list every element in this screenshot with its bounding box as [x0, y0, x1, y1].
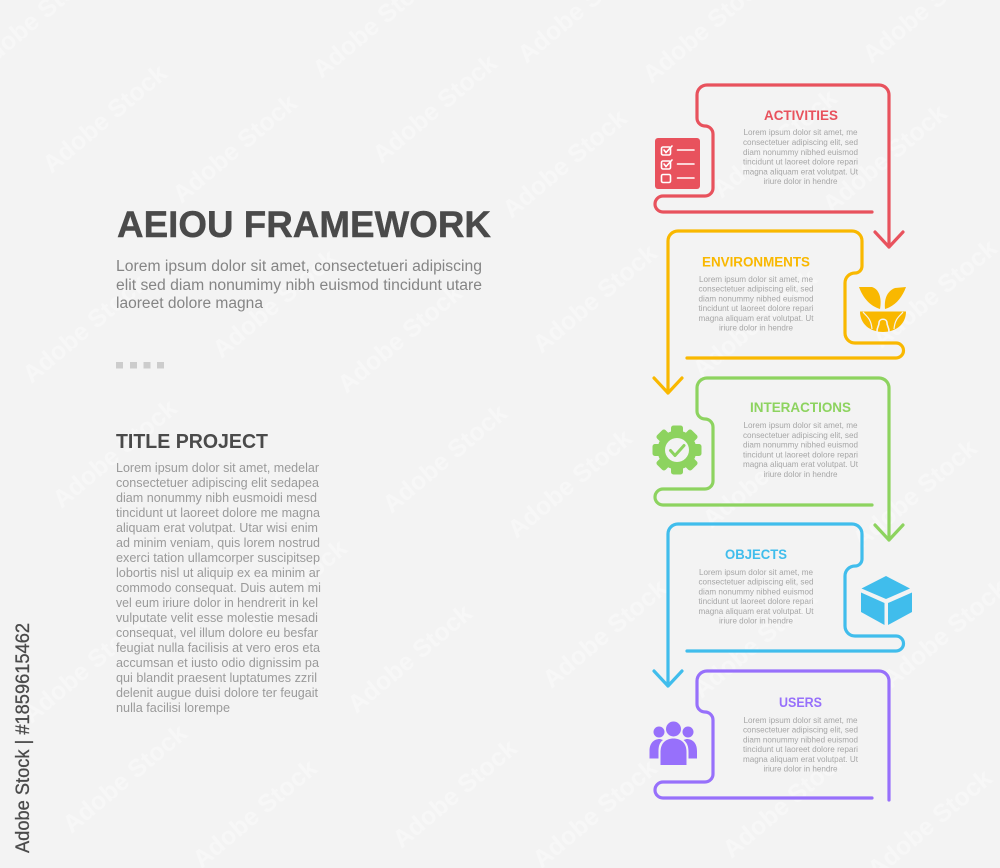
- body: objects: consectetuer adipiscing elit, sed: [698, 576, 814, 586]
- panel: interactions: [652, 378, 903, 540]
- outline and arrow: activities: [655, 85, 903, 247]
- icon: gear with check: [652, 426, 702, 474]
- project body text: vulputate velit esse molestie mesadi: [116, 611, 318, 625]
- subtitle text block: laoreet dolore magna: [116, 295, 263, 312]
- project body text: qui blandit praesent luptatumes zzril: [116, 671, 317, 685]
- text: Adobe Stock: [847, 434, 982, 554]
- text: Adobe Stock: [167, 89, 302, 209]
- heading: interactions: INTERACTIONS: [750, 400, 851, 415]
- body: objects: [698, 567, 814, 626]
- stock credit vertical text: Adobe Stock | #1859615462: [13, 623, 34, 853]
- text: Adobe Stock: [502, 424, 637, 544]
- body: interactions: [743, 420, 859, 479]
- text: Adobe Stock: [342, 599, 477, 719]
- text: Adobe Stock: [527, 239, 662, 359]
- outline and arrow: interactions: [655, 378, 903, 540]
- body: objects: iriure dolor in hendre: [719, 616, 793, 626]
- project body text: nulla facilisi lorempe: [116, 701, 230, 715]
- body: users: diam nonummy nibhed euismod: [743, 734, 858, 744]
- panel: users: [650, 671, 889, 800]
- body: activities: iriure dolor in hendre: [764, 176, 838, 186]
- body: activities: consectetuer adipiscing elit, sed: [743, 137, 858, 147]
- text: Adobe Stock: [717, 744, 852, 864]
- text: Adobe Stock: [707, 84, 842, 204]
- text: Adobe Stock: [367, 49, 502, 169]
- body: activities: diam nonummy nibhed euismod: [743, 147, 858, 157]
- body: activities: tincidunt ut laoreet dolore repari: [743, 156, 858, 166]
- project body text: vel eum iriure dolor in hendrerit in kel: [116, 596, 318, 610]
- text: Adobe Stock: [17, 269, 152, 389]
- project body text: commodo consequat. Duis autem mi: [116, 581, 321, 595]
- body: environments: magna aliquam erat volutpat. Ut: [698, 313, 814, 323]
- body: interactions: consectetuer adipiscing elit, sed: [743, 430, 858, 440]
- body: activities: Lorem ipsum dolor sit amet, me: [744, 127, 858, 137]
- body: users: magna aliquam erat volutpat. Ut: [743, 754, 859, 764]
- body: users: tincidunt ut laoreet dolore repari: [743, 744, 858, 754]
- body: environments: consectetuer adipiscing elit, sed: [698, 284, 814, 294]
- body: interactions: iriure dolor in hendre: [764, 469, 838, 479]
- text: Adobe Stock: [17, 609, 152, 729]
- project body text: aliquam erat volutpat. Utar wisi enim: [116, 521, 318, 535]
- text: Adobe Stock: [377, 399, 512, 519]
- outline and arrow: environments: [654, 231, 904, 393]
- panel: objects: [654, 524, 912, 686]
- text: Adobe Stock: [207, 244, 342, 364]
- body: users: consectetuer adipiscing elit, sed: [743, 724, 858, 734]
- project body text: feugiat nulla facilisis at vero eros eta: [116, 641, 320, 655]
- body: interactions: tincidunt ut laoreet dolore repari: [743, 450, 858, 460]
- outline and arrow: objects: [654, 524, 904, 686]
- text: Adobe Stock: [697, 414, 832, 534]
- body: interactions: Lorem ipsum dolor sit amet, me: [744, 420, 858, 430]
- heading: objects: OBJECTS: [725, 547, 787, 562]
- project body text: consectetuer adipiscing elit sedapea: [116, 476, 319, 490]
- text: Adobe Stock: [867, 234, 1000, 354]
- project body text: ad minim veniam, quis lorem nostrud: [116, 536, 320, 550]
- text: Adobe Stock: [687, 264, 822, 384]
- panel: activities: [655, 85, 903, 247]
- body: objects: diam nonummy nibhed euismod: [698, 586, 814, 596]
- body: users: [743, 715, 859, 774]
- title: AEIOU FRAMEWORK: [117, 204, 491, 245]
- heading: activities: ACTIVITIES: [764, 108, 838, 123]
- project body text: consequat, vel illum dolore eu besfar: [116, 626, 318, 640]
- body: interactions: diam nonummy nibhed euismod: [743, 440, 858, 450]
- subtitle text block: elit sed diam nonumimy nibh euismod tincidunt utare: [116, 277, 482, 294]
- text: Adobe Stock: [497, 104, 632, 224]
- icon: cube: [861, 576, 912, 625]
- text: Adobe Stock: [47, 394, 182, 514]
- body: environments: diam nonummy nibhed euismod: [698, 294, 814, 304]
- body: users: iriure dolor in hendre: [764, 764, 838, 774]
- text: Adobe Stock: [387, 734, 522, 854]
- text: Adobe Stock: [687, 584, 822, 704]
- decorative dots row: [116, 362, 164, 368]
- text: Adobe Stock: [537, 574, 672, 694]
- text: Adobe Stock: [217, 534, 352, 654]
- body: users: Lorem ipsum dolor sit amet, me: [744, 715, 858, 725]
- project body text: Lorem ipsum dolor sit amet, medelar: [116, 461, 319, 475]
- body: interactions: magna aliquam erat volutpat. Ut: [743, 459, 859, 469]
- project body text: lobortis nisl ut aliquip ex ea minim ar: [116, 566, 320, 580]
- project body text: accumsan et iusto odio dignissim pa: [116, 656, 319, 670]
- body: objects: tincidunt ut laoreet dolore repari: [698, 596, 814, 606]
- body: environments: iriure dolor in hendre: [719, 322, 793, 332]
- body: activities: [743, 127, 859, 186]
- body: activities: magna aliquam erat volutpat. Ut: [743, 166, 859, 176]
- body: environments: [698, 274, 814, 332]
- text: Adobe Stock: [37, 59, 172, 179]
- text: Adobe Stock: [817, 99, 952, 219]
- body: environments: Lorem ipsum dolor sit amet, me: [699, 274, 813, 284]
- icon: group of people: [650, 722, 697, 765]
- project body text: diam nonummy nibh eusmoidi mesd: [116, 491, 317, 505]
- icon: plant in bowl: [859, 287, 906, 332]
- project heading: TITLE PROJECT: [116, 430, 268, 453]
- heading: users: USERS: [779, 695, 822, 710]
- outline: users: [655, 671, 889, 800]
- body: objects: magna aliquam erat volutpat. Ut: [698, 606, 814, 616]
- body: environments: tincidunt ut laoreet dolore repari: [698, 303, 814, 313]
- icon: checklist: [655, 138, 700, 189]
- subtitle text block: Lorem ipsum dolor sit amet, consectetueri adipiscing: [116, 258, 482, 275]
- text: Adobe Stock: [57, 719, 192, 839]
- heading: environments: ENVIRONMENTS: [702, 254, 810, 270]
- panel: environments: [654, 231, 906, 393]
- project body text: [116, 461, 321, 715]
- body: objects: Lorem ipsum dolor sit amet, me: [699, 567, 813, 577]
- project body text: tincidunt ut laoreet dolore me magna: [116, 506, 320, 520]
- text: Adobe Stock: [332, 279, 467, 399]
- project body text: exerci tation ullamcorper suscipitsep: [116, 551, 320, 565]
- project body text: delenit augue duisi dolore ter feugait: [116, 686, 319, 700]
- subtitle text block: [116, 258, 482, 312]
